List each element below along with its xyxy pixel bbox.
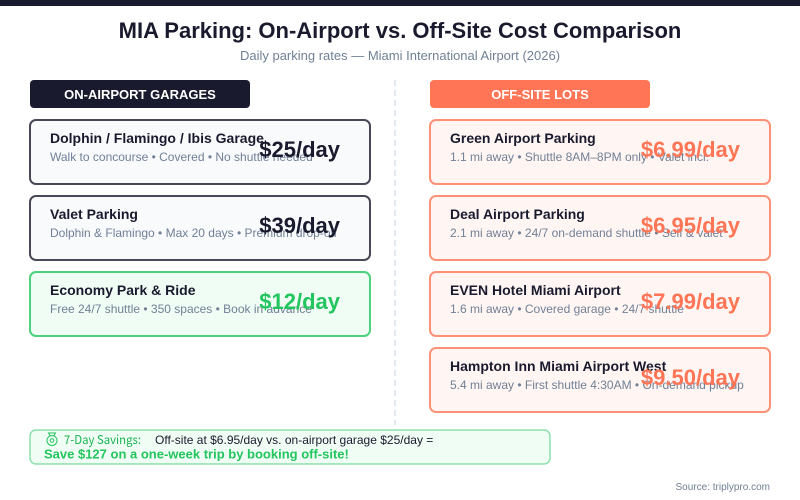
card: Deal Airport Parking: 2.1 mi away • 24/7 on-demand shuttle • Self & valet	[450, 226, 723, 240]
card: Dolphin / Flamingo / Ibis Garage: $25/day	[259, 137, 341, 162]
savings detail: Off-site at $6.95/day vs. on-airport garage $25/day =	[155, 433, 433, 447]
title: MIA Parking: On-Airport vs. Off-Site Cost Comparison	[119, 18, 681, 43]
card: Hampton Inn Miami Airport West: $9.50/day	[641, 365, 741, 390]
card: Valet Parking	[30, 196, 370, 260]
card: EVEN Hotel Miami Airport: $7.99/day	[641, 289, 741, 314]
card: Deal Airport Parking	[430, 196, 770, 260]
card: Valet Parking: $39/day	[259, 213, 341, 238]
card: Valet Parking: Valet Parking	[50, 206, 138, 222]
card: Economy Park & Ride: $12/day	[259, 289, 341, 314]
card: Green Airport Parking: 1.1 mi away • Shuttle 8AM–8PM only • Valet incl.	[450, 150, 709, 164]
heading: on-airport garages	[30, 80, 250, 108]
callout: 7-day savings	[30, 430, 550, 464]
card: Dolphin / Flamingo / Ibis Garage: Walk to concourse • Covered • No shuttle needed	[50, 150, 313, 164]
card: Dolphin / Flamingo / Ibis Garage: Dolphin / Flamingo / Ibis Garage	[50, 130, 264, 146]
heading: off-site lots: OFF-SITE LOTS	[491, 87, 589, 102]
card: Dolphin / Flamingo / Ibis Garage	[30, 120, 370, 184]
card: Deal Airport Parking: Deal Airport Parking	[450, 206, 585, 222]
card: Green Airport Parking	[430, 120, 770, 184]
card: Valet Parking: Dolphin & Flamingo • Max 20 days • Premium drop-off	[50, 226, 338, 240]
card: Hampton Inn Miami Airport West: 5.4 mi away • First shuttle 4:30AM • On-demand pickup	[450, 378, 744, 392]
card: EVEN Hotel Miami Airport	[430, 272, 770, 336]
card: Deal Airport Parking: $6.95/day	[641, 213, 741, 238]
heading: off-site lots	[430, 80, 650, 108]
card: Green Airport Parking: Green Airport Parking	[450, 130, 596, 146]
panel: off-site lots	[430, 80, 770, 412]
panel: on-airport garages	[30, 80, 370, 336]
source: Source: triplypro.com	[676, 482, 770, 493]
card: Economy Park & Ride: Economy Park & Ride	[50, 282, 196, 298]
savings highlight: Save $127 on a one-week trip by booking off-site!	[44, 446, 349, 462]
card: EVEN Hotel Miami Airport: 1.6 mi away • Covered garage • 24/7 shuttle	[450, 302, 684, 316]
card: Hampton Inn Miami Airport West	[430, 348, 770, 412]
card: Green Airport Parking: $6.99/day	[641, 137, 741, 162]
card: EVEN Hotel Miami Airport: EVEN Hotel Miami Airport	[450, 282, 621, 298]
savings label: 7-Day Savings:	[64, 431, 141, 448]
top bar	[0, 0, 800, 6]
card: Hampton Inn Miami Airport West: Hampton Inn Miami Airport West	[450, 358, 667, 374]
heading: on-airport garages: ON-AIRPORT GARAGES	[64, 87, 216, 102]
icon: money bag	[47, 433, 57, 446]
subtitle: Daily parking rates — Miami International Airport (2026)	[240, 48, 560, 63]
card: Economy Park & Ride: Free 24/7 shuttle • 350 spaces • Book in advance	[50, 302, 312, 316]
card: Economy Park & Ride	[30, 272, 370, 336]
